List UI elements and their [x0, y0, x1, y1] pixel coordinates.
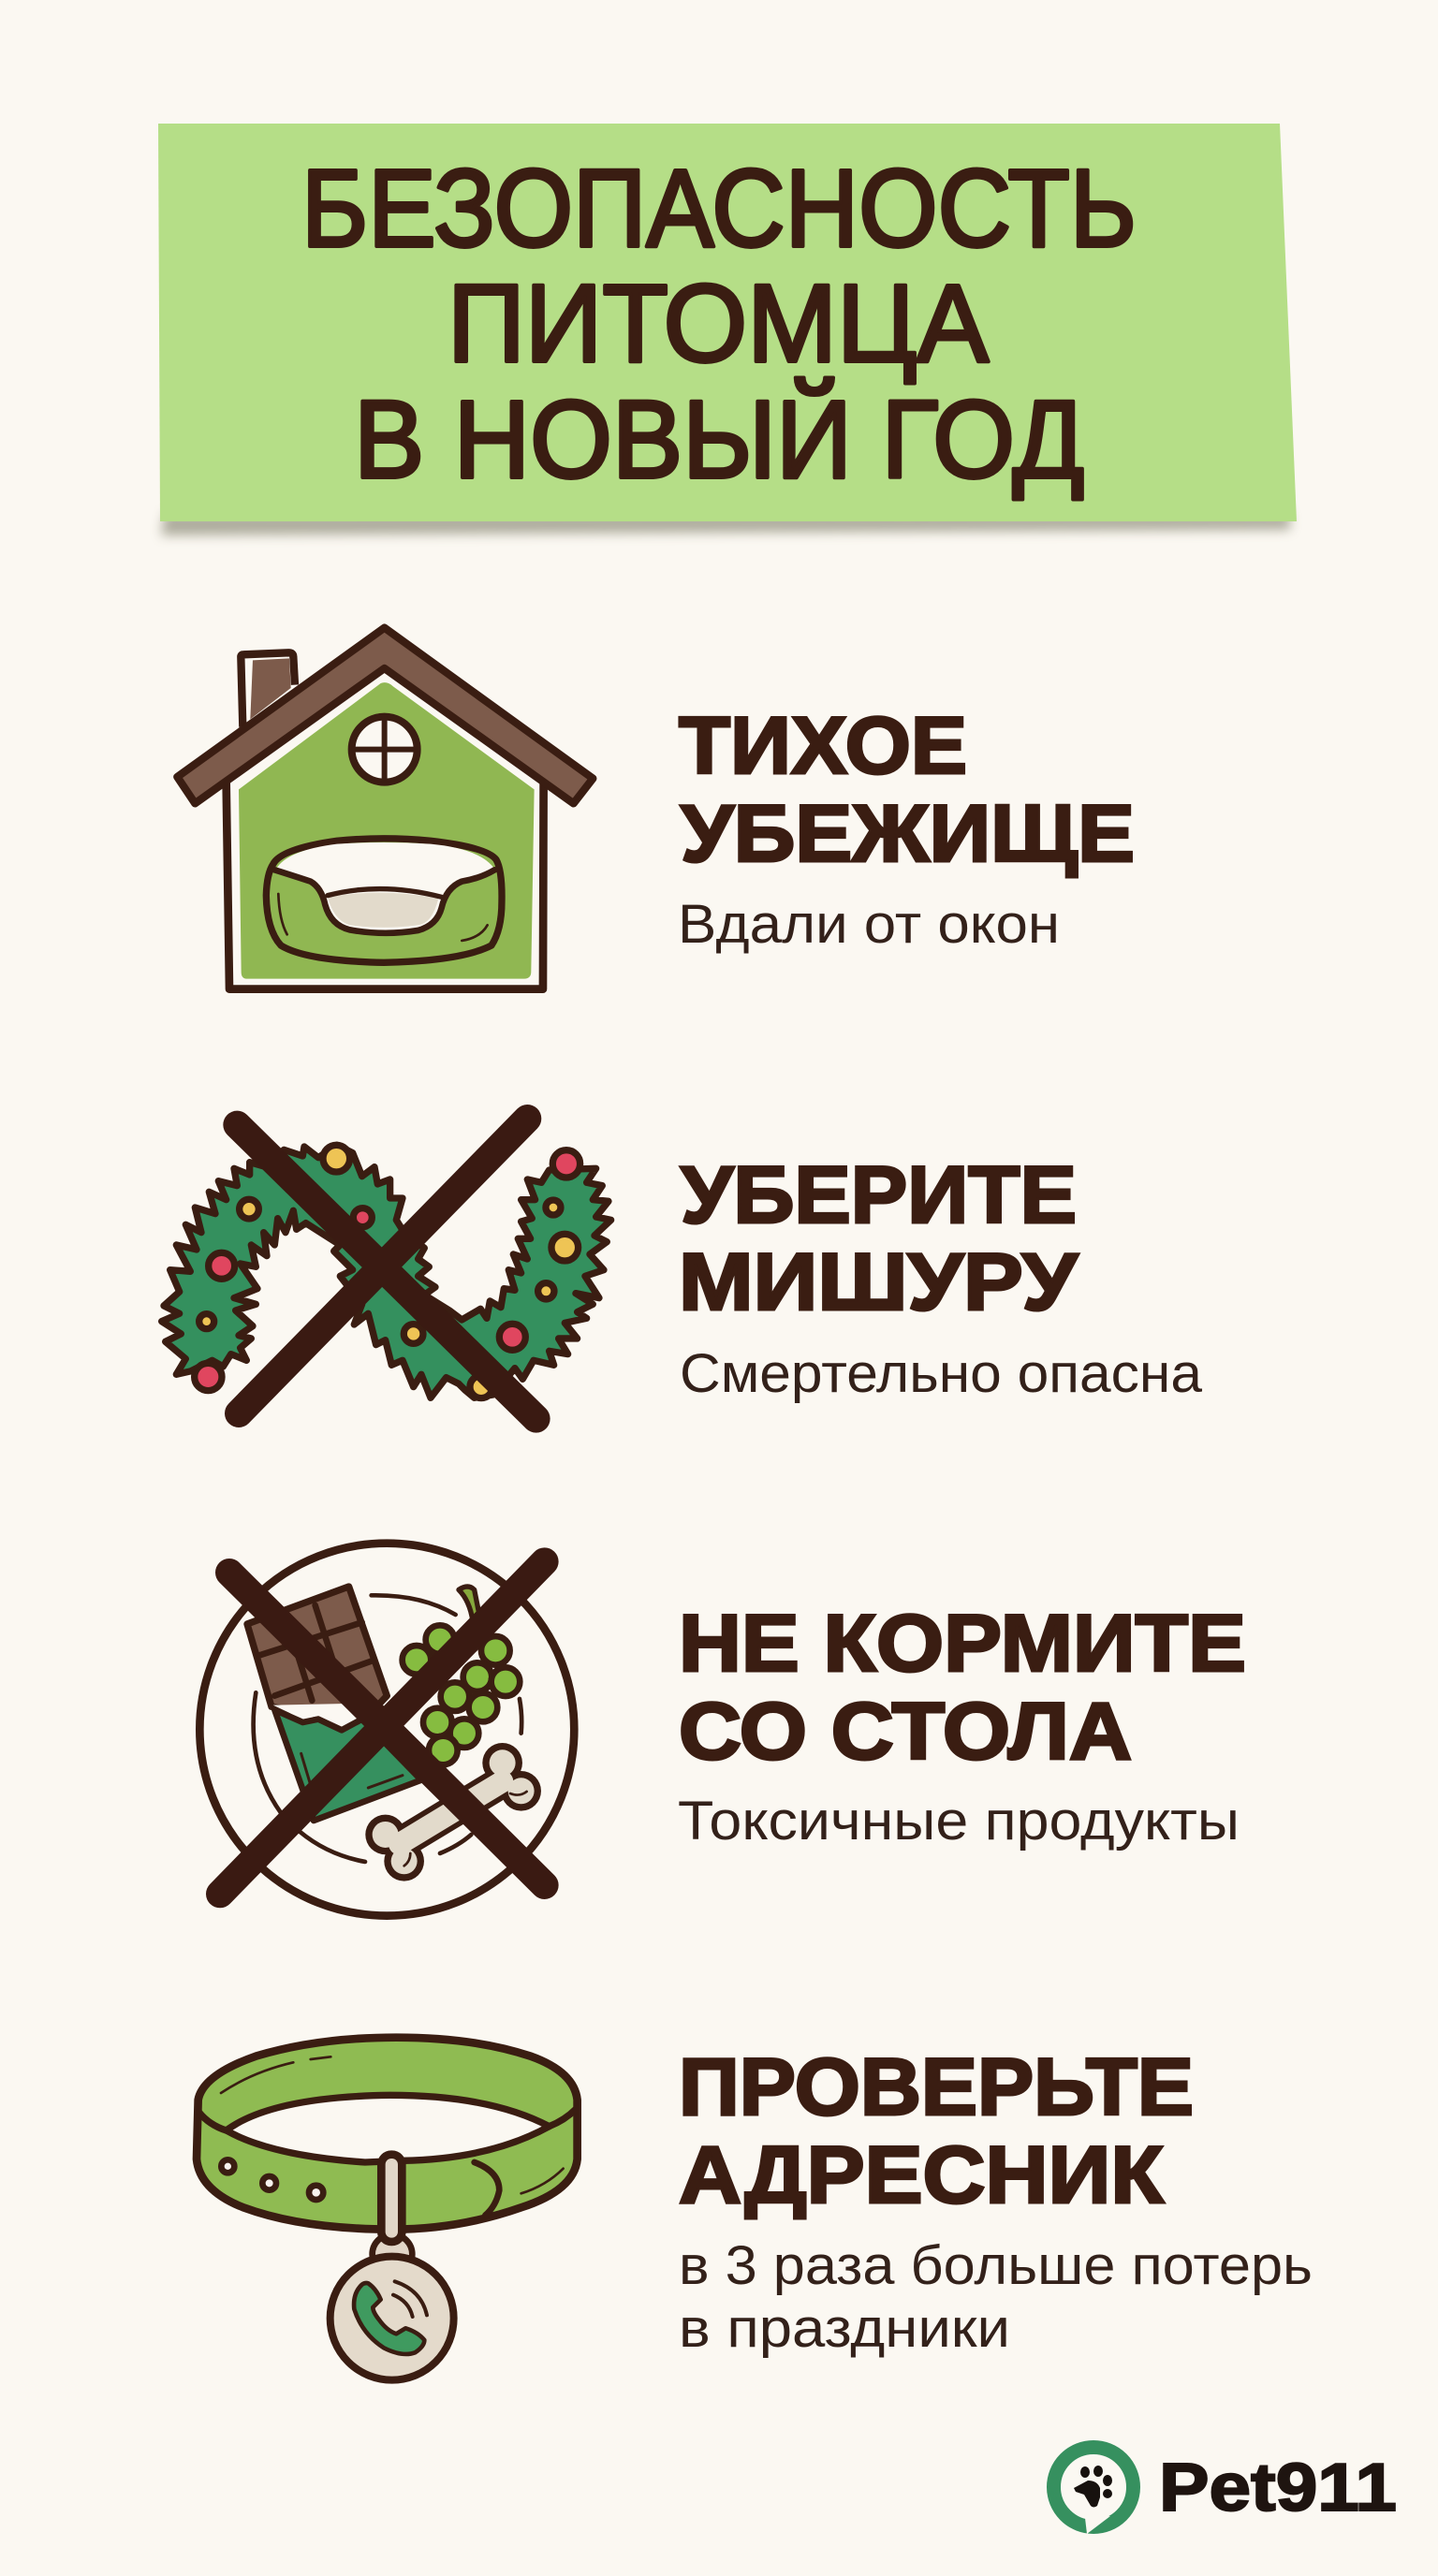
text block: check the address tag: ПРОВЕРЬТЕ — [679, 2042, 1194, 2132]
icon: crossed-out plate with chocolate, grapes and bone — [199, 1544, 574, 1916]
text block: check the address tag: в праздники — [679, 2298, 1010, 2359]
text block: do not feed from the table: НЕ КОРМИТЕ — [679, 1599, 1246, 1689]
icon: collar with address tag — [197, 2038, 578, 2380]
text block: remove tinsel: МИШУРУ — [679, 1237, 1079, 1327]
text block: quiet shelter: УБЕЖИЩЕ — [681, 789, 1135, 879]
text block: remove tinsel — [679, 1150, 1203, 1404]
text block: check the address tag — [679, 2042, 1313, 2359]
icon: house with pet bed — [177, 628, 593, 989]
text block: remove tinsel: Смертельно опасна — [680, 1343, 1203, 1404]
title heading: В НОВЫЙ ГОД — [354, 376, 1084, 502]
title heading — [301, 147, 1137, 502]
text block: do not feed from the table — [678, 1599, 1246, 1852]
text block: quiet shelter — [678, 701, 1135, 955]
text block: do not feed from the table: СО СТОЛА — [679, 1687, 1132, 1777]
title heading: БЕЗОПАСНОСТЬ — [301, 147, 1137, 271]
text block: remove tinsel: УБЕРИТЕ — [681, 1150, 1077, 1240]
wordmark: Pet911 — [1159, 2451, 1397, 2525]
text block: quiet shelter: ТИХОЕ — [679, 701, 967, 791]
text block: check the address tag: АДРЕСНИК — [679, 2130, 1165, 2220]
icon: crossed-out tinsel garland — [162, 1119, 611, 1419]
title heading: ПИТОМЦА — [448, 262, 989, 386]
logo: Pet911 — [1054, 2447, 1397, 2534]
icon: paw speech bubble — [1054, 2447, 1133, 2534]
title panel — [158, 124, 1297, 535]
text block: check the address tag: в 3 раза больше потерь — [679, 2235, 1313, 2296]
text block: quiet shelter: Вдали от окон — [678, 894, 1060, 955]
text block: do not feed from the table: Токсичные продукты — [678, 1791, 1240, 1852]
icon: phone handset — [354, 2283, 424, 2354]
